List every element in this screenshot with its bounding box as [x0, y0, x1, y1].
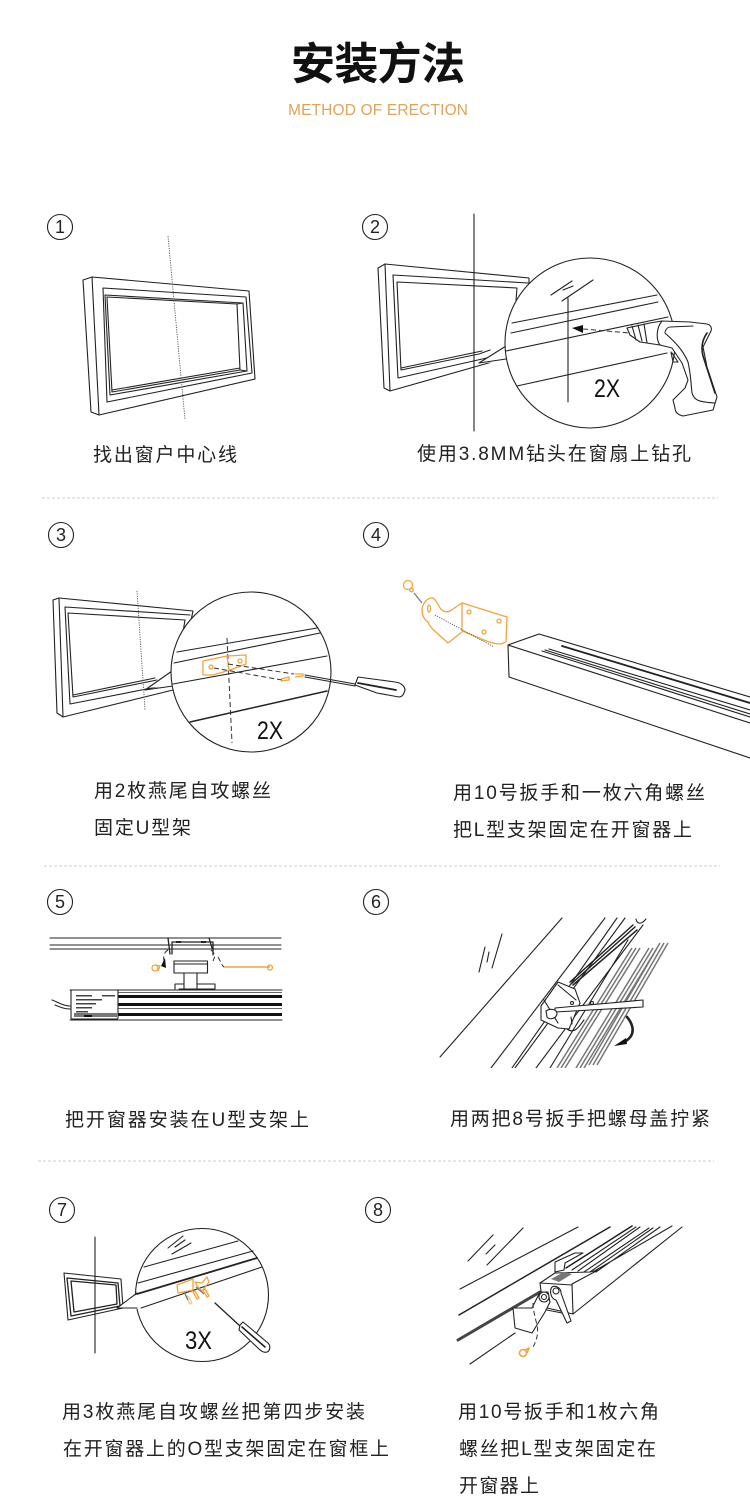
step number 6: 6 [371, 892, 381, 912]
step number 4: 4 [371, 525, 381, 545]
illustration: L bracket and opener body [404, 580, 750, 758]
caption: 固定U型架 [94, 817, 191, 839]
screwdriver [305, 675, 355, 686]
caption [453, 782, 705, 841]
illustration: window and U bracket detail [53, 591, 405, 752]
step number 1: 1 [55, 217, 65, 237]
wrench lower [555, 1000, 643, 1012]
O bracket [177, 1279, 193, 1293]
illustration: window with centre line [83, 236, 255, 420]
caption [94, 780, 271, 839]
panel: step 3 [48, 522, 405, 839]
caption: 开窗器上 [459, 1475, 539, 1497]
label 2X: 2X [257, 717, 283, 745]
step number 5 [48, 890, 72, 914]
screwdriver [215, 1303, 240, 1326]
step number 6 [364, 890, 388, 914]
caption: 在开窗器上的O型支架固定在窗框上 [63, 1438, 389, 1460]
caption: 用3枚燕尾自攻螺丝把第四步安装 [62, 1401, 365, 1423]
illustration: window and O bracket detail [64, 1228, 270, 1362]
caption: 用2枚燕尾自攻螺丝 [94, 780, 271, 802]
caption: 把开窗器安装在U型支架上 [65, 1109, 309, 1131]
panel: step 1 [48, 214, 255, 466]
label 2X: 2X [594, 375, 620, 403]
title: 安装方法 [291, 40, 465, 89]
step number 8 [366, 1198, 390, 1222]
step number 3: 3 [56, 525, 66, 545]
step number 7: 7 [57, 1200, 67, 1220]
step number 8: 8 [373, 1200, 383, 1220]
illustration: window and magnified drilling detail [378, 214, 717, 431]
caption: 用两把8号扳手把螺母盖拧紧 [450, 1108, 710, 1130]
panel: step 4 [364, 522, 750, 841]
step number 1 [48, 214, 72, 240]
rotation arrow [624, 1017, 633, 1042]
illustration: tightening nut with wrenches [440, 918, 668, 1068]
opener box [540, 1270, 598, 1314]
caption [62, 1401, 389, 1460]
step number 7 [50, 1198, 74, 1222]
panel: step 8 [366, 1198, 682, 1497]
caption: 螺丝把L型支架固定在 [459, 1438, 656, 1460]
step number 3 [48, 522, 74, 548]
caption: 用10号扳手和1枚六角 [458, 1401, 659, 1423]
subtitle: METHOD OF ERECTION [288, 102, 468, 119]
step number 5: 5 [55, 892, 65, 912]
wrench upper [570, 925, 637, 985]
L bracket [513, 1292, 550, 1333]
label 3X: 3X [185, 1327, 212, 1355]
illustration: opener mounted on U bracket [50, 938, 282, 1020]
caption: 使用3.8MM钻头在窗扇上钻孔 [417, 443, 691, 465]
illustration: L bracket fixed to opener [458, 1226, 682, 1364]
step number 4 [364, 522, 388, 548]
panel: step 2 [362, 214, 717, 465]
U bracket [203, 655, 246, 675]
step number 2 [362, 214, 388, 240]
caption [458, 1401, 659, 1497]
caption: 找出窗户中心线 [93, 444, 237, 466]
panel: step 7 [50, 1198, 389, 1460]
rear bracket [555, 1253, 583, 1272]
panel: step 5 [48, 890, 309, 1131]
caption: 用10号扳手和一枚六角螺丝 [453, 782, 705, 804]
opener grooves [566, 1226, 632, 1268]
bracket [541, 982, 580, 1029]
drill [627, 321, 717, 416]
panel: step 6 [364, 890, 710, 1130]
wrench [551, 1286, 571, 1323]
step number 2: 2 [370, 217, 380, 237]
caption: 把L型支架固定在开窗器上 [453, 819, 692, 841]
